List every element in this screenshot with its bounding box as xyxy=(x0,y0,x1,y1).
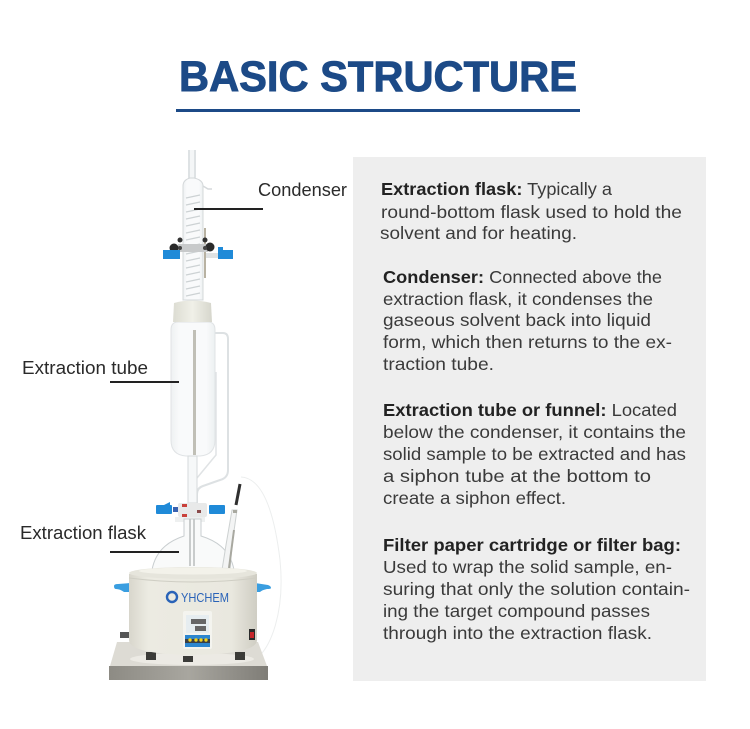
icon: left connector xyxy=(120,632,130,638)
text block: extraction tube or funnel: a siphon tube at the bottom to xyxy=(383,466,651,486)
illustration: Soxhlet extraction apparatus xyxy=(109,150,281,680)
text block: extraction tube or funnel: Extraction tube or funnel: Located xyxy=(383,400,677,420)
icon: thin sensor wire xyxy=(241,477,281,662)
icon: extraction tube xyxy=(171,322,228,505)
text block: condenser xyxy=(383,267,672,374)
text block: extraction tube or funnel: create a siphon effect. xyxy=(383,488,566,508)
label: Condenser: Condenser xyxy=(258,180,347,200)
text block: extraction tube or funnel: below the condenser, it contains the xyxy=(383,422,686,442)
icon: power switch xyxy=(249,629,255,640)
label: Extraction flask: Extraction flask xyxy=(20,523,147,543)
text block: condenser: traction tube. xyxy=(383,354,494,374)
text block: filter paper cartridge: through into the extraction flask. xyxy=(383,623,652,643)
icon: condenser xyxy=(183,150,212,300)
text block: extraction flask xyxy=(380,179,682,243)
text block: filter paper cartridge: Filter paper cartridge or filter bag: xyxy=(383,535,681,555)
text block: extraction tube or funnel: solid sample to be extracted and has xyxy=(383,444,686,464)
icon: heating mantle xyxy=(129,567,257,655)
text block: condenser: gaseous solvent back into liquid xyxy=(383,310,651,330)
title: BASIC STRUCTURE xyxy=(179,53,577,101)
icon: thermometer side neck xyxy=(222,484,240,570)
text block: condenser: form, which then returns to the ex- xyxy=(383,332,672,352)
icon: feet xyxy=(146,652,245,662)
icon: round-bottom flask xyxy=(152,519,234,570)
text block: condenser: Condenser: Connected above the xyxy=(383,267,662,287)
icon: upper clamp xyxy=(163,228,233,278)
icon: lower valve xyxy=(156,502,225,522)
text block: filter paper cartridge: suring that only the solution contain- xyxy=(383,579,690,599)
text block: condenser: extraction flask, it condenses the xyxy=(383,289,653,309)
text block: extraction tube or funnel xyxy=(383,400,686,508)
text block: extraction flask: solvent and for heating. xyxy=(380,223,577,243)
text block: extraction flask: Extraction flask: Typically a xyxy=(381,179,612,199)
text block: filter paper cartridge: ing the target compound passes xyxy=(383,601,650,621)
logo: YHCHEM: YHCHEM xyxy=(181,591,229,605)
icon: metal base plate xyxy=(109,642,268,680)
icon: blue handles xyxy=(114,583,271,592)
label: Extraction tube: Extraction tube xyxy=(22,358,148,378)
panel: descriptions xyxy=(353,157,706,681)
text block: filter paper cartridge: Used to wrap the solid sample, en- xyxy=(383,557,672,577)
text block: extraction flask: round-bottom flask used to hold the xyxy=(381,202,682,222)
icon: ground glass joint xyxy=(173,300,212,322)
text block: filter paper cartridge xyxy=(383,535,690,643)
icon: control panel xyxy=(183,611,212,649)
